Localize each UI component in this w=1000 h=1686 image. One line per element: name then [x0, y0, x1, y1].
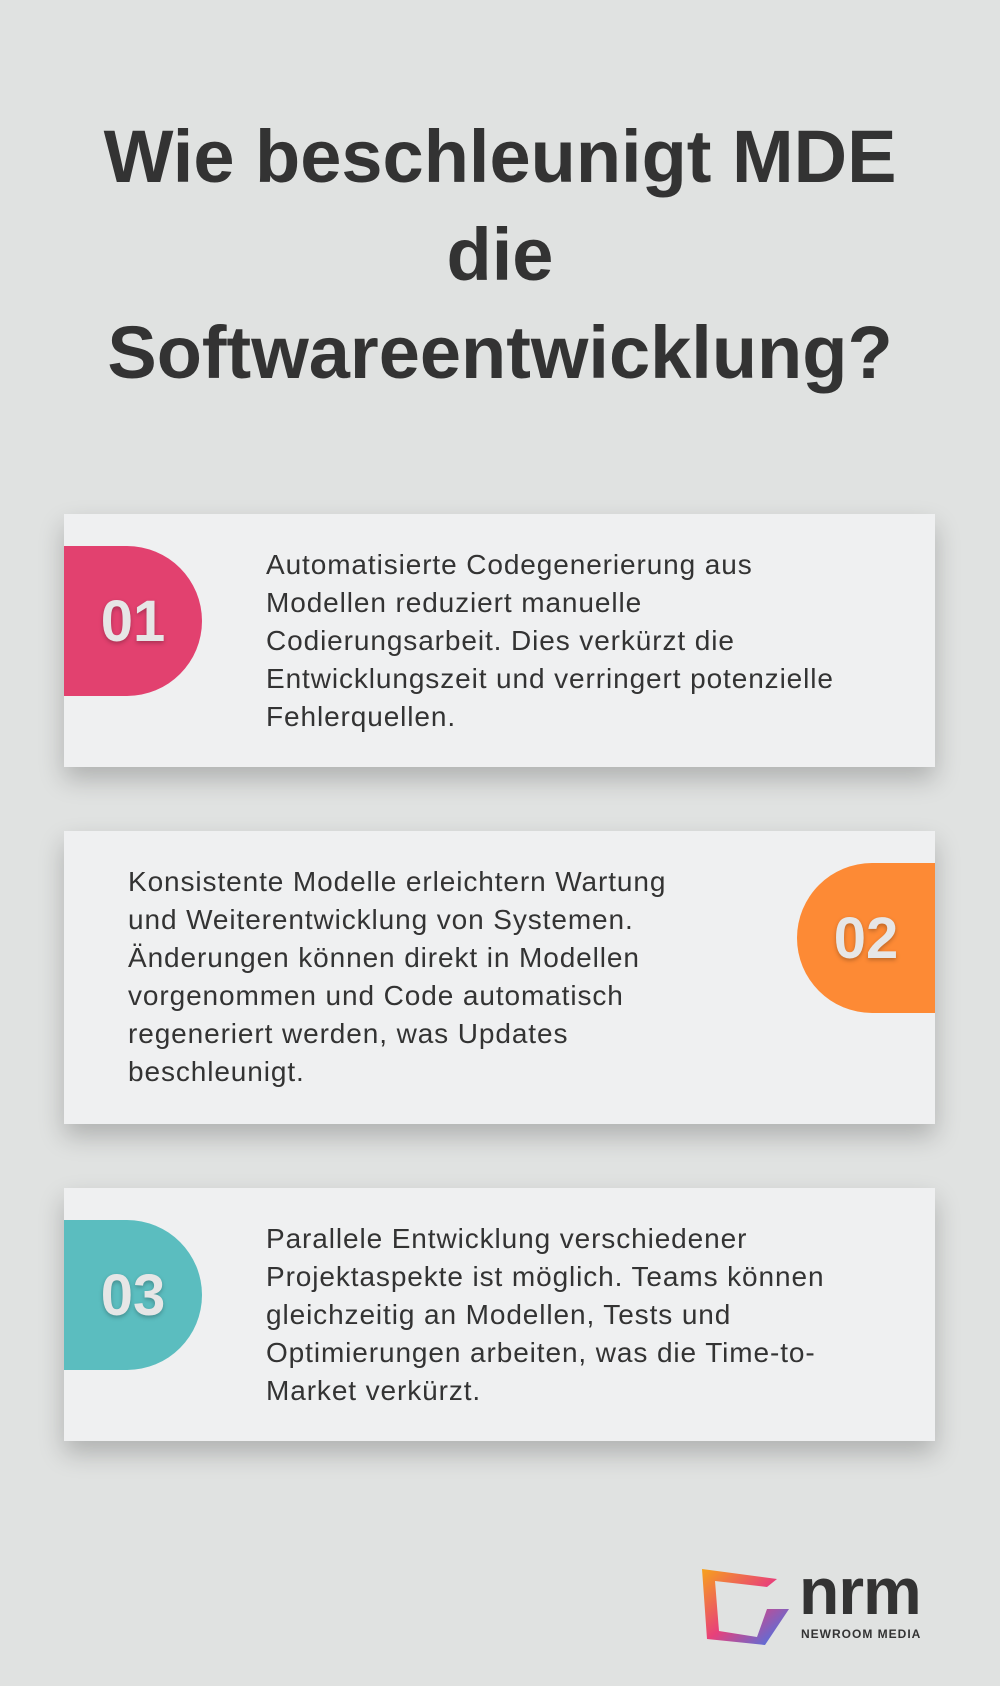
title — [104, 115, 896, 394]
text 03: Parallele Entwicklung verschiedener — [266, 1223, 747, 1254]
text 02: regeneriert werden, was Updates — [128, 1018, 568, 1049]
text 01: Fehlerquellen. — [266, 701, 456, 732]
text 02: und Weiterentwicklung von Systemen. — [128, 904, 634, 935]
text 03 — [266, 1223, 824, 1406]
text 02: beschleunigt. — [128, 1056, 305, 1087]
text 01: Codierungsarbeit. Dies verkürzt die — [266, 625, 735, 656]
panel: card 03 — [64, 1188, 935, 1441]
text 01: Modellen reduziert manuelle — [266, 587, 642, 618]
logo — [702, 1554, 921, 1645]
panel: card 01 — [64, 514, 935, 767]
text 03: Optimierungen arbeiten, was die Time-to- — [266, 1337, 816, 1368]
badge 02: 02 — [834, 906, 898, 970]
badge 01: 01 — [101, 588, 165, 654]
badge 03 — [64, 1220, 202, 1370]
text 01: Entwicklungszeit und verringert potenzielle — [266, 663, 834, 694]
text 02: Änderungen können direkt in Modellen — [128, 942, 640, 973]
badge 03: 03 — [101, 1262, 165, 1328]
text 03: Projektaspekte ist möglich. Teams können — [266, 1261, 824, 1292]
logo text: nrm — [799, 1554, 921, 1628]
text 01: Automatisierte Codegenerierung aus — [266, 549, 753, 580]
badge 02 — [797, 863, 935, 1013]
logo icon — [702, 1569, 789, 1645]
logo: NEWROOM MEDIA — [801, 1627, 921, 1641]
text 03: gleichzeitig an Modellen, Tests und — [266, 1299, 731, 1330]
text 02: Konsistente Modelle erleichtern Wartung — [128, 866, 666, 897]
text 03: Market verkürzt. — [266, 1375, 481, 1406]
title: die — [447, 213, 553, 296]
text 02 — [128, 866, 666, 1087]
text 01 — [266, 549, 834, 732]
panel: card 02 — [64, 831, 935, 1124]
text 02: vorgenommen und Code automatisch — [128, 980, 624, 1011]
badge 01 — [64, 546, 202, 696]
title: Wie beschleunigt MDE — [104, 115, 896, 198]
title: Softwareentwicklung? — [107, 311, 893, 394]
